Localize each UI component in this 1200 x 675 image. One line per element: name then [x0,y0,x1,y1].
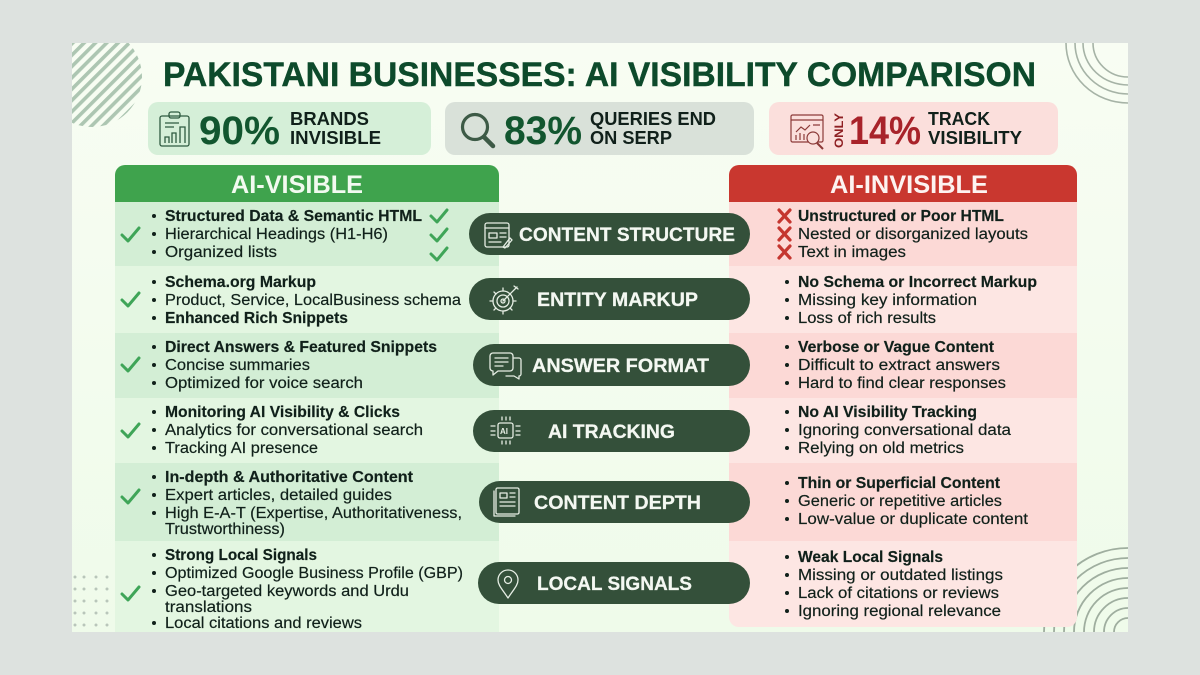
panel: AI-invisible: AI-INVISIBLE [830,171,988,199]
pill: local signals [478,562,750,604]
row text: Loss of rich results [798,310,936,327]
pill: answer format: ANSWER FORMAT [532,356,709,377]
checkmarks [122,210,447,600]
row text [165,208,463,632]
row text: Structured Data & Semantic HTML [165,208,422,225]
pill: AI tracking: AI TRACKING [548,422,675,443]
icon: document with pencil [485,223,512,248]
row text: Concise summaries [165,357,310,374]
stat: only 14% track visibility: VISIBILITY [928,127,1023,148]
row text [798,208,1037,620]
row text: Local citations and reviews [165,615,362,632]
pill: AI tracking: AI [500,427,508,436]
icon: report with magnifier [791,115,823,149]
row text: Text in images [798,244,906,261]
stat: 90% brands invisible: 90% [199,109,280,153]
decoration: hatched circle [72,43,142,127]
row text: Trustworthiness) [165,521,285,538]
icon: clipboard chart [160,112,189,146]
row text: Missing or outdated listings [798,567,1003,584]
row text: High E-A-T (Expertise, Authoritativeness, [165,505,462,522]
row text: Ignoring conversational data [798,422,1011,439]
stat: 90% brands invisible [148,102,431,155]
stat: only 14% track visibility: 14% [849,109,921,153]
row text: Verbose or Vague Content [798,339,994,356]
row text: Strong Local Signals [165,547,317,564]
pill: answer format [473,344,750,386]
row text: Hierarchical Headings (H1-H6) [165,226,388,243]
cross marks [779,210,790,258]
row text: Expert articles, detailed guides [165,487,392,504]
stat: 90% brands invisible: INVISIBLE [290,127,381,148]
row text: Organized lists [165,244,277,261]
stat: only 14% track visibility [769,102,1058,155]
background card [72,43,1128,632]
row text: Thin or Superficial Content [798,475,1000,492]
title: PAKISTANI BUSINESSES: AI VISIBILITY COMPARISON [163,56,1036,94]
panel: AI-visible: AI-VISIBLE [231,171,363,199]
decoration: bottom right arcs [1044,548,1128,632]
row text: Missing key information [798,292,977,309]
row text: Analytics for conversational search [165,422,423,439]
row text: Optimized Google Business Profile (GBP) [165,565,463,582]
row text: Difficult to extract answers [798,357,1000,374]
panel: AI-invisible [729,165,1077,627]
row text: In-depth & Authoritative Content [165,469,413,486]
icon: gear target [490,286,518,314]
row text: Optimized for voice search [165,375,363,392]
icon: newspaper [494,488,519,516]
row text: Enhanced Rich Snippets [165,310,348,327]
bullets [785,280,789,613]
stat: only 14% track visibility: ONLY [834,113,846,148]
pill: entity markup [469,278,750,320]
stat: only 14% track visibility: TRACK [928,108,991,129]
header: AI-visible [115,165,499,202]
panel: AI-visible [115,165,499,632]
row text: Weak Local Signals [798,549,943,566]
row text: Tracking AI presence [165,440,318,457]
decoration: dots [74,576,108,626]
row text: Nested or disorganized layouts [798,226,1028,243]
bullets [152,214,156,625]
stat: 83% queries end on SERP: QUERIES END [590,108,716,129]
row text: translations [165,599,252,616]
decoration: top right arcs [1066,43,1128,103]
row text: Product, Service, LocalBusiness schema [165,292,461,309]
row text: No AI Visibility Tracking [798,404,977,421]
stat: 83% queries end on SERP: ON SERP [590,127,672,148]
stat: 83% queries end on SERP [445,102,754,155]
header: AI-invisible [729,165,1077,202]
pill: content structure: CONTENT STRUCTURE [519,225,735,246]
pill: AI tracking [473,410,750,452]
row text: Ignoring regional relevance [798,603,1001,620]
row text: Relying on old metrics [798,440,964,457]
stat: 90% brands invisible: BRANDS [290,108,369,129]
row text: Low-value or duplicate content [798,511,1029,528]
pill: content depth: CONTENT DEPTH [534,493,701,514]
stat: 83% queries end on SERP: 83% [504,109,582,153]
icon: magnifier [462,114,493,146]
row text: Monitoring AI Visibility & Clicks [165,404,400,421]
icon: AI chip [491,417,520,444]
row text: Hard to find clear responses [798,375,1006,392]
icon: chat bubbles [490,353,521,379]
pill: entity markup: ENTITY MARKUP [537,290,698,311]
row text: Lack of citations or reviews [798,585,999,602]
row text: No Schema or Incorrect Markup [798,274,1037,291]
row text: Geo-targeted keywords and Urdu [165,583,409,600]
row text: Generic or repetitive articles [798,493,1002,510]
row text: Unstructured or Poor HTML [798,208,1004,225]
row text: Schema.org Markup [165,274,316,291]
pill: content depth [479,481,750,523]
icon: map pin [498,570,518,598]
pill: content structure [469,213,750,255]
pill: local signals: LOCAL SIGNALS [537,574,692,595]
row text: Direct Answers & Featured Snippets [165,339,437,356]
